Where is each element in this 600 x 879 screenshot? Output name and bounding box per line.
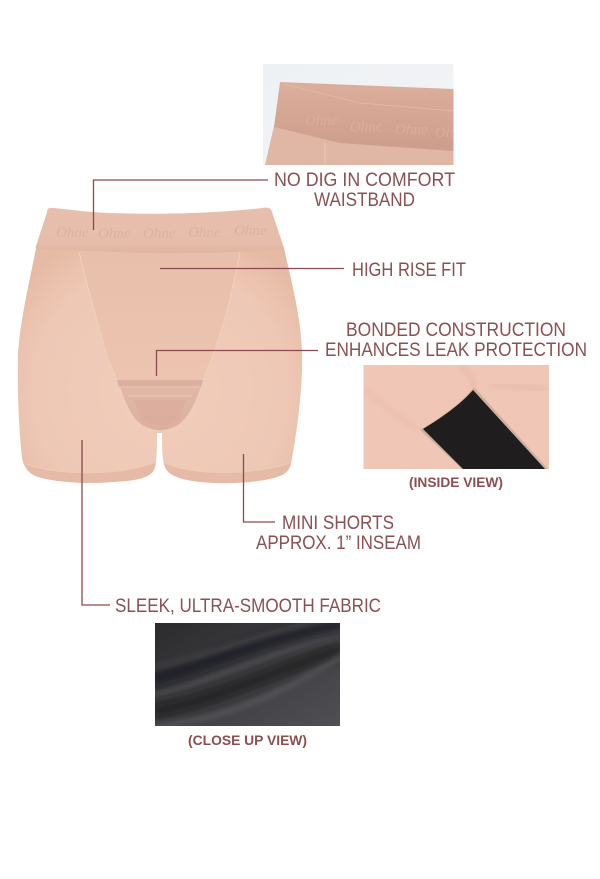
label: mini shorts: MINI SHORTS — [282, 512, 394, 534]
label: mini shorts — [256, 512, 421, 554]
label: bonded construction — [325, 319, 587, 361]
label: bonded construction: BONDED CONSTRUCTION — [346, 319, 566, 341]
photo: waistband detail: Ohne — [305, 113, 338, 129]
label: fabric: SLEEK, ULTRA-SMOOTH FABRIC — [115, 595, 381, 617]
label: waistband: NO DIG IN COMFORT — [274, 169, 455, 191]
waistband logo text: Ohne — [234, 223, 267, 239]
photo: waistband detail: Ohne — [350, 119, 383, 135]
label: mini shorts: APPROX. 1” INSEAM — [256, 532, 421, 554]
photo: close up fabric — [155, 623, 340, 726]
photo: waistband detail — [263, 64, 468, 165]
leader: mini shorts — [244, 454, 275, 522]
caption: close up view: (CLOSE UP VIEW) — [188, 733, 307, 748]
waistband logo text: Ohne — [143, 226, 176, 242]
leader: bonded construction — [156, 350, 318, 376]
waistband — [36, 208, 284, 253]
leader: waistband — [94, 180, 268, 230]
leader: high rise — [160, 268, 344, 270]
leader: fabric — [82, 440, 110, 605]
shading and hems — [26, 462, 292, 484]
photo: inside view — [363, 365, 549, 469]
label: high rise: HIGH RISE FIT — [352, 259, 466, 281]
waistband logo text: Ohne — [98, 226, 131, 242]
waistband logo text: Ohne — [188, 225, 221, 241]
caption: inside view: (INSIDE VIEW) — [409, 475, 503, 490]
panel seams — [79, 252, 240, 413]
label: waistband: WAISTBAND — [314, 189, 415, 211]
shorts body — [18, 248, 302, 483]
waistband logo text — [56, 223, 267, 242]
front panel — [79, 252, 240, 381]
photo: waistband detail: Ohne — [395, 122, 428, 138]
waistband logo text: Ohne — [56, 225, 89, 241]
gusset — [117, 380, 203, 430]
label: waistband — [274, 169, 455, 211]
photo: waistband detail: Ohne — [435, 125, 468, 141]
product photo: shorts — [18, 208, 302, 490]
